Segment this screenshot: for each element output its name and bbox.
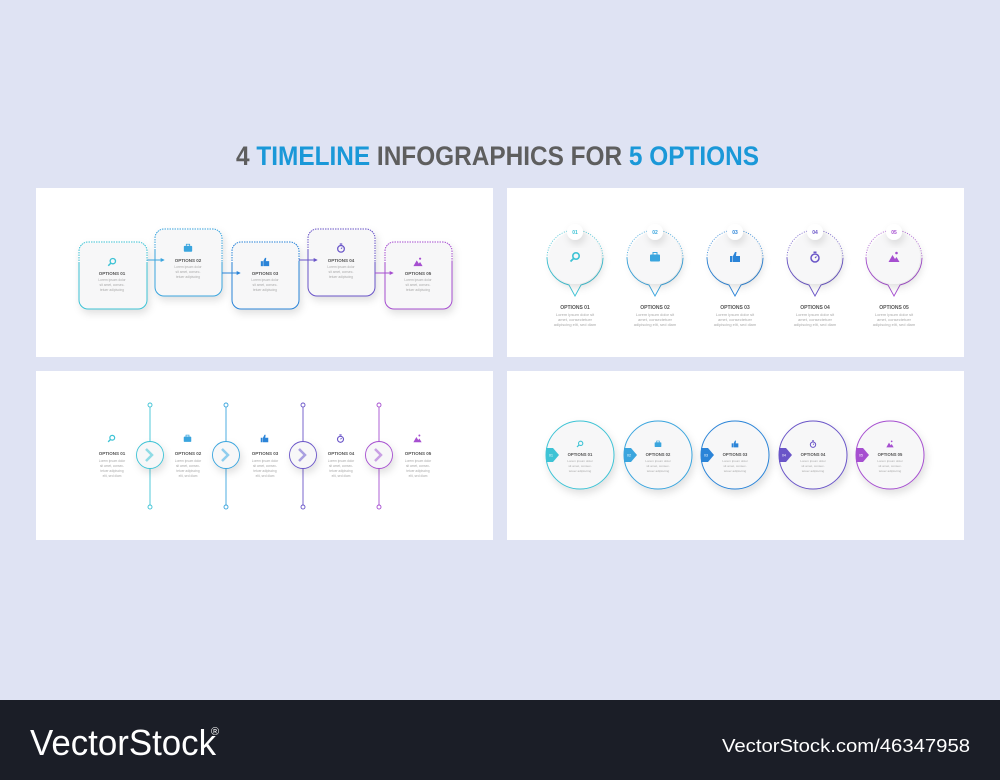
circle 01: OPTIONS 01 — [568, 452, 593, 457]
circle 03: OPTIONS 03 — [723, 452, 748, 457]
circle 02: Lorem ipsum dolor — [645, 459, 671, 463]
circle 03: sit amet, consec- — [723, 464, 747, 468]
options text: sit amet, consec- — [406, 464, 430, 468]
circle 02: tetuer adipiscing — [647, 469, 670, 473]
pin 02 — [627, 224, 683, 327]
panel: timeline 1 squares: sit amet, consec- — [329, 270, 353, 274]
circle 02: sit amet, consec- — [646, 464, 670, 468]
pin 01: Lorem ipsum dolor sit — [556, 312, 595, 317]
pin 02: Lorem ipsum dolor sit — [636, 312, 675, 317]
options text: OPTIONS 04 — [328, 451, 355, 456]
pin 03: adipiscing elit, sed diam — [714, 322, 757, 327]
pin 04: amet, consectetuer — [798, 317, 833, 322]
panel: timeline 1 squares: sit amet, consec- — [406, 283, 430, 287]
panel: timeline 1 squares: OPTIONS 03 — [252, 271, 279, 276]
line connectors — [148, 403, 381, 509]
panel: timeline 1 squares: tetuer adipiscing — [406, 288, 430, 292]
panel: timeline 1 squares: OPTIONS 02 — [175, 258, 202, 263]
circle 02: OPTIONS 02 — [646, 452, 671, 457]
pin 05: Lorem ipsum dolor sit — [875, 312, 914, 317]
circle 05: OPTIONS 05 — [878, 452, 903, 457]
pin 03: OPTIONS 03 — [720, 305, 750, 311]
pin 05: 05 — [891, 230, 897, 236]
panel: timeline 2 pins — [507, 188, 964, 357]
options text: tetuer adipiscing — [100, 469, 124, 473]
options text: OPTIONS 03 — [252, 451, 279, 456]
pin 01: OPTIONS 01 — [560, 305, 590, 311]
pin 01 — [547, 224, 603, 327]
panel: timeline 1 squares: OPTIONS 04 — [328, 258, 355, 263]
pin 01: amet, consectetuer — [558, 317, 593, 322]
circle 04: tetuer adipiscing — [802, 469, 825, 473]
chevron circles — [136, 442, 392, 468]
box 05 — [385, 242, 452, 309]
options text: tetuer adipiscing — [329, 469, 353, 473]
circle 05: 05 — [859, 454, 863, 458]
panel: timeline 1 squares: Lorem ipsum dolor — [98, 278, 127, 282]
circle 01: sit amet, consec- — [568, 464, 592, 468]
options text: Lorem ipsum dolor — [99, 459, 126, 463]
box 04 — [308, 229, 375, 296]
pin 04: OPTIONS 04 — [800, 305, 830, 311]
circle 04: 04 — [782, 454, 786, 458]
options text: elit, sed diam — [103, 474, 122, 478]
box 03 — [232, 242, 299, 309]
options text — [99, 434, 432, 478]
panel: timeline 1 squares: tetuer adipiscing — [176, 275, 200, 279]
options text: sit amet, consec- — [329, 464, 353, 468]
pin 02: OPTIONS 02 — [640, 305, 670, 311]
title: 4 TIMELINE INFOGRAPHICS FOR 5 OPTIONS — [236, 141, 759, 171]
panel: timeline 1 squares: Lorem ipsum dolor — [327, 265, 356, 269]
circle 02: 02 — [627, 454, 631, 458]
pin 05: adipiscing elit, sed diam — [873, 322, 916, 327]
pin 04 — [787, 224, 843, 327]
options text: sit amet, consec- — [176, 464, 200, 468]
options text: elit, sed diam — [256, 474, 275, 478]
pin 05: OPTIONS 05 — [879, 305, 909, 311]
circle 05 — [856, 421, 924, 489]
panel: timeline 1 squares: sit amet, consec- — [100, 283, 124, 287]
pin 02: adipiscing elit, sed diam — [634, 322, 677, 327]
box 01 — [79, 242, 147, 309]
options text: Lorem ipsum dolor — [252, 459, 279, 463]
circle 01: Lorem ipsum dolor — [567, 459, 593, 463]
pin 03: Lorem ipsum dolor sit — [716, 312, 755, 317]
circle 01: tetuer adipiscing — [569, 469, 592, 473]
panel: timeline 1 squares — [36, 188, 493, 357]
panel: timeline 1 squares: OPTIONS 01 — [99, 271, 126, 276]
panel: timeline 1 squares: sit amet, consec- — [176, 270, 200, 274]
options text: sit amet, consec- — [253, 464, 277, 468]
options text: Lorem ipsum dolor — [175, 459, 202, 463]
circle 04: OPTIONS 04 — [801, 452, 826, 457]
circle 03: tetuer adipiscing — [724, 469, 747, 473]
pin 05 — [866, 224, 922, 327]
circle 03: Lorem ipsum dolor — [722, 459, 748, 463]
dotted tops — [79, 229, 452, 262]
panel: timeline 1 squares: Lorem ipsum dolor — [174, 265, 203, 269]
options text: elit, sed diam — [332, 474, 351, 478]
pin 01: 01 — [572, 230, 578, 236]
panel: timeline 1 squares: Lorem ipsum dolor — [404, 278, 433, 282]
circle 04: sit amet, consec- — [801, 464, 825, 468]
pin 01: adipiscing elit, sed diam — [554, 322, 597, 327]
options text: OPTIONS 05 — [405, 451, 432, 456]
arrows — [147, 260, 393, 273]
pin 03 — [707, 224, 763, 327]
panel: timeline 1 squares: tetuer adipiscing — [329, 275, 353, 279]
options text: OPTIONS 02 — [175, 451, 202, 456]
panel: timeline 1 squares: sit amet, consec- — [253, 283, 277, 287]
circle 03 — [701, 421, 769, 489]
options text: elit, sed diam — [179, 474, 198, 478]
circle 05: tetuer adipiscing — [879, 469, 902, 473]
pin 05: amet, consectetuer — [877, 317, 912, 322]
box 02 — [155, 229, 222, 296]
options text: elit, sed diam — [409, 474, 428, 478]
footer bar: VectorStock — [30, 722, 217, 763]
pin 03: amet, consectetuer — [718, 317, 753, 322]
pin 04: 04 — [812, 230, 818, 236]
panel: timeline 4 circles — [507, 371, 964, 540]
footer bar — [0, 700, 1000, 780]
circle 01: 01 — [549, 454, 553, 458]
pin 02: 02 — [652, 230, 658, 236]
circle 01 — [546, 421, 614, 489]
options text: Lorem ipsum dolor — [405, 459, 432, 463]
panel: timeline 1 squares: tetuer adipiscing — [253, 288, 277, 292]
options text: tetuer adipiscing — [176, 469, 200, 473]
circle 04: Lorem ipsum dolor — [800, 459, 826, 463]
options text: sit amet, consec- — [100, 464, 124, 468]
footer bar: VectorStock.com/46347958 — [722, 736, 970, 756]
panel: timeline 1 squares: OPTIONS 05 — [405, 271, 432, 276]
circle 05: sit amet, consec- — [878, 464, 902, 468]
circle 02 — [624, 421, 692, 489]
options text: tetuer adipiscing — [406, 469, 430, 473]
pin 04: adipiscing elit, sed diam — [794, 322, 837, 327]
circle 05: Lorem ipsum dolor — [877, 459, 903, 463]
options text: tetuer adipiscing — [253, 469, 277, 473]
panel: timeline 1 squares: tetuer adipiscing — [100, 288, 124, 292]
pin 02: amet, consectetuer — [638, 317, 673, 322]
panel: timeline 3 vertical lines — [36, 371, 493, 540]
options text: Lorem ipsum dolor — [328, 459, 355, 463]
pin 03: 03 — [732, 230, 738, 236]
circle 04 — [779, 421, 847, 489]
panel: timeline 1 squares: Lorem ipsum dolor — [251, 278, 280, 282]
footer bar: ® — [211, 726, 219, 738]
circle 03: 03 — [704, 454, 708, 458]
pin 04: Lorem ipsum dolor sit — [796, 312, 835, 317]
options text: OPTIONS 01 — [99, 451, 126, 456]
